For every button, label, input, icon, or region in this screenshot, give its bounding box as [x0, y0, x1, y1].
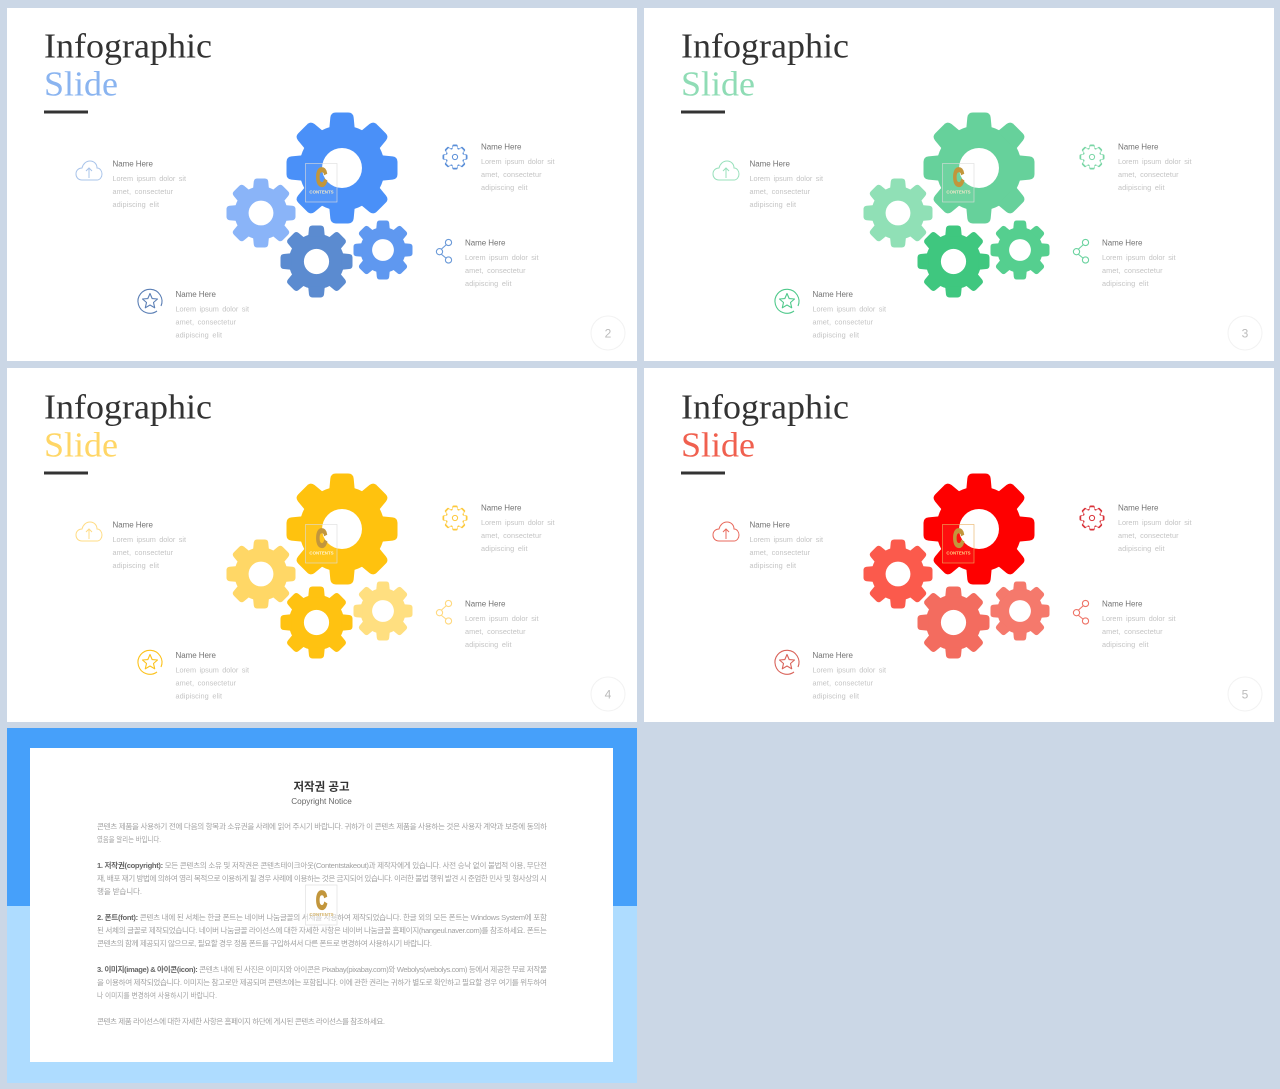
page number: [1228, 677, 1262, 711]
icon: share nodes: [1073, 600, 1089, 624]
title: Infographic Slide: [681, 26, 849, 104]
text block: upload: Name Here: [750, 160, 791, 168]
text block: settings: Lorem ipsum dolor sit: [481, 518, 554, 527]
title underline: [681, 472, 725, 474]
page number: 3: [1242, 326, 1249, 340]
text block: star: Lorem ipsum dolor sit: [812, 304, 886, 314]
panel: red gear slide: [644, 368, 1274, 722]
text block: settings: amet, consectetur: [481, 531, 542, 540]
title: Infographic Slide: Infographic: [44, 388, 212, 426]
text block: upload: amet, consectetur: [750, 187, 811, 196]
text block: star: Name Here: [812, 651, 854, 660]
page number: [591, 677, 625, 711]
notice heading: 저작권 공고: [293, 780, 350, 794]
text block: star: amet, consectetur: [812, 318, 874, 326]
title: Infographic Slide: [44, 388, 212, 464]
text block: upload: Name Here: [750, 520, 791, 530]
text block: upload: adipiscing elit: [750, 561, 796, 570]
notice body text: 콘텐츠의 함께 제공되지 않으므로, 필요할 경우 정품 폰트를 구입하셔서 다른 폰트로 변경하여 사용하시기 바랍니다.: [97, 938, 432, 948]
text block: upload: [112, 520, 186, 570]
text block: upload: adipiscing elit: [750, 200, 796, 209]
text block: settings: amet, consectetur: [481, 170, 542, 179]
icon: share nodes: [436, 239, 452, 263]
page number: 4: [605, 688, 612, 702]
icon: cloud upload: [713, 161, 739, 180]
text block: star: amet, consectetur: [176, 318, 237, 326]
text block: share: amet, consectetur: [465, 627, 526, 636]
watermark logo: CONTENTS: [309, 912, 334, 917]
text block: settings: amet, consectetur: [1118, 170, 1179, 179]
title underline: [44, 110, 88, 114]
text block: star: Name Here: [812, 290, 854, 299]
text block: upload: adipiscing elit: [112, 561, 159, 570]
notice body text: 나 이미지를 변경하여 사용하시기 바랍니다.: [97, 990, 217, 1000]
title: Infographic Slide: Infographic: [681, 26, 849, 66]
text block: settings: Name Here: [481, 504, 522, 512]
watermark logo: [942, 164, 974, 202]
text block: settings: adipiscing elit: [1118, 183, 1164, 192]
watermark logo: C: [316, 525, 327, 553]
icon: settings gear: [1080, 144, 1104, 170]
panel: copyright notice: [7, 728, 637, 1083]
notice body text: 였음을 알리는 바입니다.: [97, 834, 161, 844]
text block: upload: amet, consectetur: [112, 548, 174, 557]
text block: share: adipiscing elit: [465, 279, 512, 288]
notice body text: 콘텐츠 제품을 사용하기 전에 다음의 항목과 소유권을 사례에 읽어 주시기 바랍니다. 귀하가 이 콘텐츠 제품을 사용하는 것은 사용자 계약과 보증에 동의하: [97, 821, 547, 831]
text block: share: amet, consectetur: [465, 266, 526, 275]
notice body text: 된 서체의 글꼴로 제작되었습니다. 네이버 나눔글꼴 라이선스에 대한 자세한 사항은 네이버 나눔글꼴 홈페이지(hangeul.naver.com)를 참조하세요. 폰트는: [97, 925, 547, 935]
notice heading: [291, 780, 352, 806]
text block: settings: Lorem ipsum dolor sit: [481, 157, 554, 166]
notice body text: 콘텐츠 제품 라이선스에 대한 자세한 사항은 홈페이지 하단에 게시된 콘텐츠 라이선스를 참조하세요.: [97, 1016, 385, 1026]
text block: share: Name Here: [465, 600, 506, 608]
title underline: [681, 110, 725, 114]
text block: settings: Lorem ipsum dolor sit: [1118, 157, 1192, 166]
text block: settings: Name Here: [481, 142, 522, 152]
title: Infographic Slide: Slide: [44, 426, 118, 464]
watermark logo: CONTENTS: [309, 550, 334, 556]
icon: cloud upload: [713, 522, 739, 541]
panel: yellow gear slide: [7, 368, 637, 722]
text block: settings: Lorem ipsum dolor sit: [1118, 518, 1192, 527]
text block: share: [465, 600, 538, 649]
text block: star: Name Here: [176, 651, 217, 660]
notice body text: [97, 821, 547, 1026]
text block: settings: amet, consectetur: [1118, 531, 1179, 540]
text block: star: [812, 290, 886, 340]
text block: share: Lorem ipsum dolor sit: [1102, 253, 1176, 262]
text block: share: Name Here: [1102, 238, 1143, 248]
text block: star: Lorem ipsum dolor sit: [176, 304, 249, 314]
title underline: [44, 472, 88, 474]
title: Infographic Slide: Slide: [681, 64, 755, 104]
title: Infographic Slide: Infographic: [681, 388, 849, 426]
watermark logo: CONTENTS: [309, 190, 334, 194]
watermark logo: C: [316, 887, 327, 915]
icon: settings gear: [442, 506, 468, 530]
watermark logo: [942, 524, 974, 563]
text block: star: [812, 651, 886, 700]
text block: share: Lorem ipsum dolor sit: [1102, 614, 1176, 623]
text block: settings: adipiscing elit: [481, 183, 528, 192]
watermark logo: C: [953, 525, 964, 553]
text block: upload: amet, consectetur: [750, 548, 811, 557]
panel: blue gear slide: [7, 8, 637, 361]
title: Infographic Slide: Infographic: [44, 26, 212, 66]
text block: settings: [1118, 142, 1192, 192]
text block: upload: amet, consectetur: [112, 187, 174, 196]
title: Infographic Slide: [44, 26, 212, 104]
text block: settings: Name Here: [1118, 142, 1159, 152]
notice body text: 1. 저작권(copyright): 모든 콘텐츠의 소유 및 저작권은 콘텐츠테이크아웃(Contentstakeout)과 제작자에게 있습니다. 사전 승낙 없이 불법적 이용, 무단전: [97, 860, 547, 870]
text block: share: [1102, 600, 1176, 649]
icon: cloud upload: [76, 161, 102, 180]
notice body text: 3. 이미지(image) & 아이콘(icon): 콘텐츠 내에 된 사진은 이미지와 아이콘은 Pixabay(pixabay.com)와 Webolys(webolys.com) 등에서 제공한 무료 저작물: [97, 964, 547, 974]
text block: settings: adipiscing elit: [1118, 544, 1164, 553]
title: Infographic Slide: [681, 388, 849, 464]
text block: settings: [481, 504, 554, 553]
text block: upload: Lorem ipsum dolor sit: [750, 174, 823, 183]
gear cluster: [226, 112, 412, 298]
notice body text: 을 이용하여 제작되었습니다. 이미지는 참고로만 제공되며 콘텐츠에는 포함됩니다. 이에 관한 권리는 귀하가 별도로 확인하고 필요할 경우 여기를 위두하여: [97, 977, 547, 987]
watermark logo: C: [316, 164, 327, 192]
text block: share: [465, 238, 538, 288]
text block: share: adipiscing elit: [1102, 640, 1148, 649]
notice body text: 2. 폰트(font): 콘텐츠 내에 된 서체는 한글 폰트는 네이버 나눔글꼴의 서체를 사용하여 제작되었습니다. 한글 외의 모든 폰트는 Windows System에 포함: [97, 912, 547, 922]
text block: settings: adipiscing elit: [481, 544, 528, 553]
icon: settings gear: [1080, 506, 1104, 530]
text block: star: amet, consectetur: [812, 678, 874, 688]
text block: star: Name Here: [176, 290, 217, 299]
text block: star: adipiscing elit: [176, 692, 222, 700]
text block: share: Name Here: [465, 238, 506, 248]
watermark logo: C: [953, 164, 964, 192]
text block: star: Lorem ipsum dolor sit: [812, 666, 886, 674]
title: Infographic Slide: Slide: [681, 426, 755, 464]
text block: upload: Lorem ipsum dolor sit: [750, 535, 823, 544]
text block: share: adipiscing elit: [465, 640, 512, 649]
icon: share nodes: [1073, 239, 1089, 263]
text block: share: Lorem ipsum dolor sit: [465, 614, 538, 623]
text block: star: Lorem ipsum dolor sit: [176, 666, 249, 674]
watermark logo: [306, 524, 337, 563]
text block: share: Lorem ipsum dolor sit: [465, 253, 538, 262]
text block: star: adipiscing elit: [812, 330, 859, 340]
icon: star badge: [138, 289, 162, 313]
text block: star: [176, 651, 249, 700]
gear cluster: [864, 112, 1050, 298]
icon: star badge: [138, 650, 162, 674]
panel: green gear slide: [644, 8, 1274, 361]
text block: share: amet, consectetur: [1102, 266, 1163, 275]
notice body text: 행을 받습니다.: [97, 886, 142, 896]
title: Infographic Slide: Slide: [44, 64, 118, 104]
notice heading: Copyright Notice: [291, 797, 352, 806]
text block: upload: Lorem ipsum dolor sit: [112, 535, 186, 544]
watermark logo: [306, 885, 337, 925]
icon: share nodes: [436, 600, 452, 624]
icon: star badge: [775, 289, 799, 313]
notice body text: 재, 배포 재기 방법에 의하여 영리 목적으로 이용하게 될 경우 사례에 이용하는 것은 금지되어 있습니다. 이러한 불법 행위 발견 시 준엄한 민사 및 형사상의 시: [97, 873, 547, 883]
text block: upload: Name Here: [112, 160, 154, 168]
page number: 5: [1242, 688, 1249, 702]
gear cluster: [226, 474, 412, 658]
text block: settings: [1118, 504, 1192, 553]
watermark logo: CONTENTS: [946, 190, 971, 194]
text block: share: adipiscing elit: [1102, 279, 1148, 288]
text block: settings: Name Here: [1118, 504, 1159, 512]
text block: star: adipiscing elit: [812, 692, 859, 700]
watermark logo: [306, 164, 337, 202]
text block: upload: Name Here: [112, 520, 154, 530]
gear cluster: [864, 474, 1050, 658]
page number: [1228, 316, 1262, 350]
text block: settings: [481, 142, 554, 192]
icon: star badge: [775, 650, 799, 674]
text block: share: amet, consectetur: [1102, 627, 1163, 636]
watermark logo: CONTENTS: [946, 550, 971, 556]
page number: 2: [605, 326, 612, 340]
text block: upload: [750, 520, 823, 570]
text block: share: Name Here: [1102, 600, 1143, 608]
text block: upload: [112, 160, 186, 209]
icon: cloud upload: [76, 522, 102, 541]
text block: upload: adipiscing elit: [112, 200, 159, 209]
text block: upload: Lorem ipsum dolor sit: [112, 174, 186, 183]
text block: share: [1102, 238, 1176, 288]
text block: star: [176, 290, 249, 340]
text block: star: adipiscing elit: [176, 330, 222, 340]
page number: [591, 316, 625, 350]
text block: star: amet, consectetur: [176, 678, 237, 688]
icon: settings gear: [442, 144, 468, 170]
text block: upload: [750, 160, 823, 209]
